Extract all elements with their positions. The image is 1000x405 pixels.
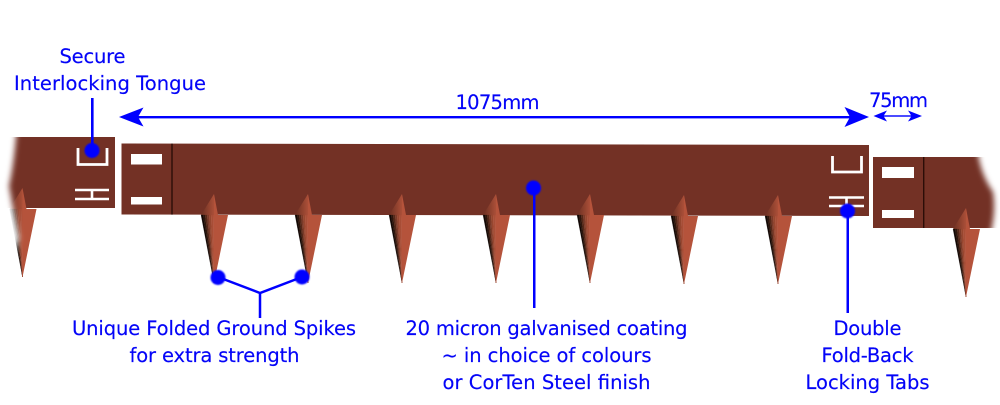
callout: fold-back locking tabs	[806, 204, 930, 394]
callout: galvanised coating	[406, 180, 688, 394]
callout: folded ground spikes: Unique Folded Ground Spikes	[72, 317, 356, 340]
text: 75mm: 75mm	[869, 89, 928, 112]
arrow: 1075mm dimension	[119, 107, 869, 127]
callout: secure interlocking tongue	[14, 45, 206, 158]
icon: interlocking tongue slot	[78, 148, 107, 164]
panel: main edging section	[122, 144, 869, 284]
callout: folded ground spikes	[72, 270, 356, 367]
callout: fold-back locking tabs: Fold-Back	[822, 344, 914, 367]
icon: right ground spike	[953, 208, 980, 297]
arrow: 75mm dimension	[874, 110, 922, 122]
callout: fold-back locking tabs: Double	[834, 317, 902, 340]
icon: tab slots	[131, 154, 162, 204]
callout: galvanised coating: or CorTen Steel finish	[442, 371, 650, 394]
icon: left ground spike	[10, 188, 36, 277]
icon: H locking slot	[75, 190, 109, 199]
callout: galvanised coating: ~ in choice of colours	[442, 344, 652, 367]
callout: secure interlocking tongue: Secure	[60, 45, 126, 68]
icon: folded ground spikes	[201, 194, 792, 284]
icon: right tab slots	[882, 167, 914, 218]
icon: H locking slot right	[829, 198, 864, 206]
callout: galvanised coating: 20 micron galvanised coating	[406, 317, 688, 340]
callout: secure interlocking tongue: Interlocking Tongue	[14, 72, 206, 95]
callout: fold-back locking tabs: Locking Tabs	[806, 371, 930, 394]
panel: right edging section	[873, 145, 1000, 297]
panel: left edging section	[0, 110, 115, 277]
callout: folded ground spikes: for extra strength	[130, 344, 300, 367]
text: 1075mm: 1075mm	[456, 91, 540, 114]
icon: interlocking tongue slot right	[832, 156, 862, 172]
